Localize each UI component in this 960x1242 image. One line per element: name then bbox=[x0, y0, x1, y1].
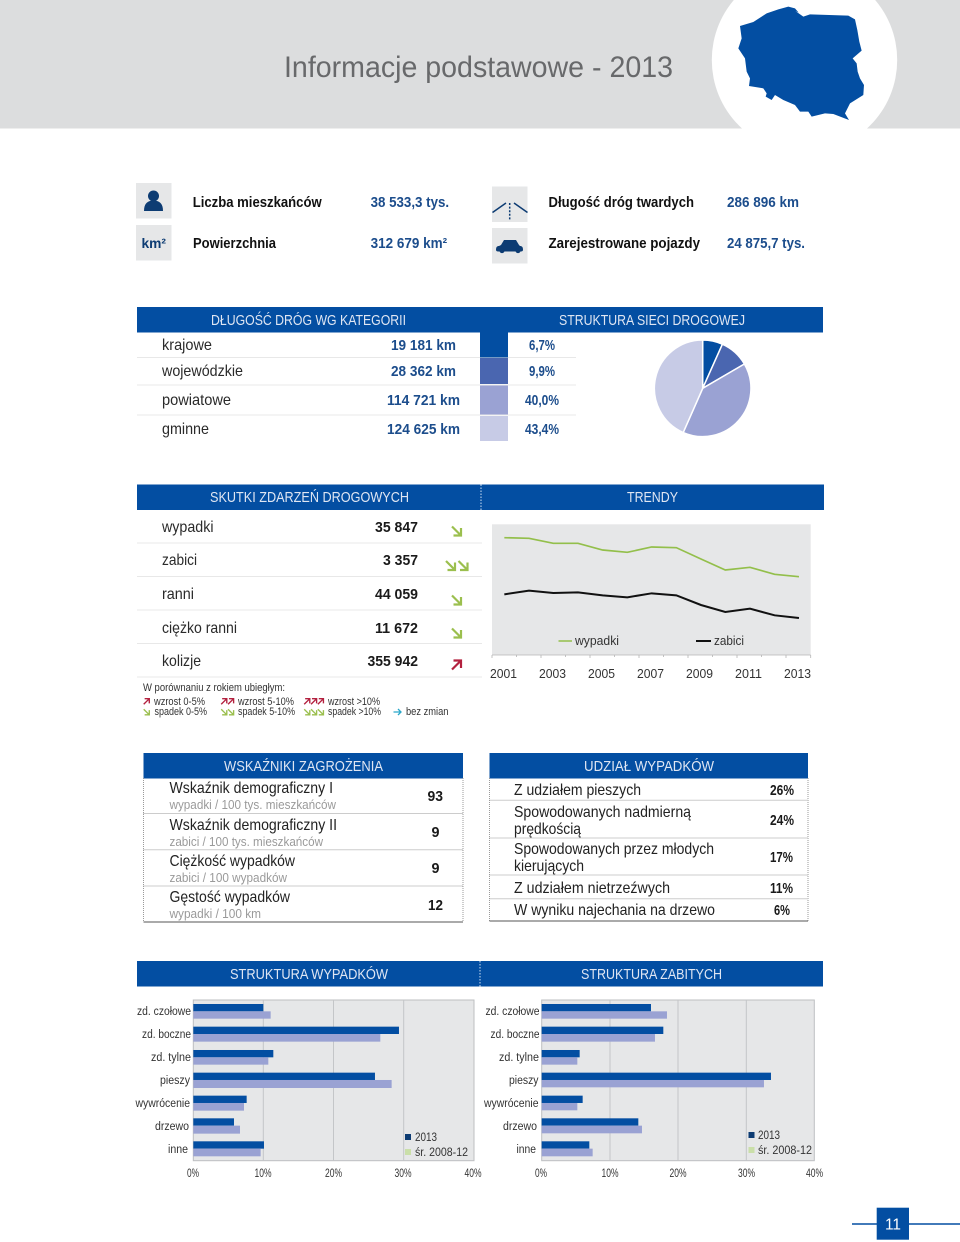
axis labels: 40% bbox=[806, 1168, 823, 1180]
indicator I: 93 bbox=[428, 788, 443, 805]
category labels: wywrócenie bbox=[483, 1098, 538, 1110]
axis labels bbox=[535, 1168, 823, 1180]
category labels: wywrócenie bbox=[135, 1098, 190, 1110]
legend: change compared to previous year: spadek 0-5% bbox=[154, 706, 207, 718]
axis labels: 40% bbox=[464, 1168, 482, 1180]
row: speeding: 24% bbox=[770, 812, 794, 829]
indicator I: wypadki / 100 tys. mieszkańców bbox=[169, 797, 337, 812]
row: powiatowe: powiatowe bbox=[162, 392, 231, 409]
legend: change compared to previous year: W porównaniu z rokiem ubiegłym: bbox=[143, 682, 285, 694]
header band bbox=[0, 0, 960, 128]
year axis: 2009 bbox=[686, 667, 713, 681]
row: ranni bbox=[162, 586, 461, 604]
row: speeding: Spowodowanych nadmierną bbox=[514, 804, 691, 821]
row: pedestrians bbox=[514, 782, 794, 799]
axis labels: 10% bbox=[254, 1168, 272, 1180]
row: ciezko ranni bbox=[162, 620, 461, 638]
row: young drivers: Spowodowanych przez młodych bbox=[514, 841, 714, 858]
row: ciezko ranni: 11 672 bbox=[375, 620, 418, 637]
legend: change compared to previous year: wzrost 5-10% bbox=[237, 696, 294, 708]
pie chart bbox=[654, 340, 751, 437]
row: krajowe: 19 181 km bbox=[391, 338, 456, 354]
row: wypadki bbox=[161, 519, 461, 536]
heading: network structure: STRUKTURA SIECI DROGOWEJ bbox=[559, 312, 745, 329]
axis labels: 20% bbox=[325, 1168, 342, 1180]
legend: change compared to previous year: bez zmian bbox=[406, 706, 448, 718]
indicator II: Wskaźnik demograficzny II bbox=[170, 817, 337, 834]
row: powiatowe: 114 721 km bbox=[387, 393, 460, 409]
row: zabici: zabici bbox=[162, 552, 197, 569]
category labels: zd. czołowe bbox=[137, 1006, 191, 1018]
row: gminne: gminne bbox=[162, 421, 209, 438]
row: ranni: 44 059 bbox=[375, 586, 418, 603]
category labels: drzewo bbox=[155, 1121, 189, 1133]
icon: km2: km² bbox=[142, 236, 167, 251]
row: drunk bbox=[514, 880, 793, 897]
section header: structure bbox=[137, 961, 823, 986]
row: wypadki: 35 847 bbox=[375, 519, 418, 536]
icon: person bbox=[136, 183, 172, 218]
chart legend: wypadki bbox=[574, 634, 619, 648]
heading: road categories: DŁUGOŚĆ DRÓG WG KATEGORII bbox=[211, 311, 406, 329]
title: Informacje podstawowe - 2013 bbox=[284, 51, 673, 84]
category labels: drzewo bbox=[503, 1121, 537, 1133]
row: kolizje bbox=[162, 653, 461, 670]
stats row: road length bbox=[492, 186, 799, 222]
row: zabici: 3 357 bbox=[383, 552, 418, 569]
row: tree: 6% bbox=[774, 902, 790, 919]
category labels: zd. boczne bbox=[142, 1029, 191, 1041]
indicator I bbox=[169, 780, 443, 812]
panel: road network structure pie bbox=[559, 312, 751, 437]
panel: share of accidents bbox=[490, 753, 808, 921]
row: krajowe: 6,7% bbox=[529, 338, 555, 354]
category labels: zd. tylne bbox=[151, 1052, 191, 1064]
row: young drivers: kierujących bbox=[514, 858, 584, 875]
row: ranni: ranni bbox=[162, 586, 194, 603]
chart legend bbox=[405, 1132, 468, 1159]
year axis bbox=[490, 667, 811, 681]
category labels: zd. tylne bbox=[499, 1052, 539, 1064]
panel: risk indicators bbox=[144, 753, 463, 922]
heading: consequences: SKUTKI ZDARZEŃ DROGOWYCH bbox=[210, 489, 409, 506]
heading: risk indicators: WSKAŹNIKI ZAGROŻENIA bbox=[224, 757, 383, 775]
row: young drivers bbox=[514, 841, 793, 875]
axis labels: 20% bbox=[670, 1168, 686, 1180]
indicator II: 9 bbox=[432, 824, 440, 841]
row: pedestrians: 26% bbox=[770, 782, 794, 799]
heading: share of accidents: UDZIAŁ WYPADKÓW bbox=[584, 758, 715, 775]
category labels: pieszy bbox=[509, 1075, 539, 1087]
page number bbox=[852, 1208, 960, 1240]
bar chart: accident structure bbox=[135, 1000, 482, 1180]
row: krajowe: krajowe bbox=[162, 337, 212, 354]
row: speeding: prędkością bbox=[514, 821, 581, 838]
stats row: area bbox=[136, 225, 447, 260]
indicator density: 12 bbox=[428, 897, 443, 914]
row: kolizje: 355 942 bbox=[368, 653, 418, 670]
row: wojewodzkie: 28 362 km bbox=[391, 364, 456, 380]
row: wojewodzkie: wojewódzkie bbox=[161, 363, 243, 380]
category labels bbox=[135, 1006, 191, 1156]
axis labels: 0% bbox=[187, 1168, 199, 1180]
chart legend: śr. 2008-12 bbox=[758, 1145, 812, 1157]
row: gminne: 43,4% bbox=[525, 422, 559, 438]
row: zabici bbox=[162, 552, 468, 570]
legend: change compared to previous year: spadek >10% bbox=[328, 706, 381, 718]
axis labels: 10% bbox=[602, 1168, 618, 1180]
stats row: population: Liczba mieszkańców bbox=[193, 195, 322, 211]
chart legend: 2013 bbox=[415, 1132, 437, 1144]
indicator II bbox=[170, 817, 440, 849]
map of Poland in white circle bbox=[712, 0, 898, 128]
indicator density bbox=[169, 889, 443, 921]
indicator density: Gęstość wypadków bbox=[170, 889, 290, 906]
row: drunk: Z udziałem nietrzeźwych bbox=[514, 880, 670, 897]
chart legend: zabici bbox=[714, 634, 744, 648]
page number: 11 bbox=[885, 1216, 901, 1234]
axis labels: 30% bbox=[394, 1168, 412, 1180]
chart legend bbox=[558, 634, 744, 648]
stats row: road length: 286 896 km bbox=[727, 195, 799, 211]
row: drunk: 11% bbox=[770, 880, 793, 897]
line: wypadki bbox=[504, 538, 799, 577]
legend: change compared to previous year: spadek 5-10% bbox=[238, 706, 295, 718]
indicator severity bbox=[170, 853, 440, 885]
stats row: population bbox=[136, 183, 449, 218]
category labels: inne bbox=[516, 1144, 536, 1156]
row: powiatowe: 40,0% bbox=[525, 393, 559, 409]
chart legend bbox=[748, 1130, 812, 1157]
stats row: vehicles bbox=[492, 228, 805, 264]
axis labels: 30% bbox=[738, 1168, 755, 1180]
heading: fatality structure: STRUKTURA ZABITYCH bbox=[581, 966, 722, 983]
indicator severity: Ciężkość wypadków bbox=[170, 853, 295, 870]
panel: trends line chart bbox=[490, 489, 811, 681]
row: krajowe bbox=[162, 332, 555, 358]
heading: accident structure: STRUKTURA WYPADKÓW bbox=[230, 966, 389, 983]
year axis: 2011 bbox=[735, 667, 762, 681]
stats row: vehicles: Zarejestrowane pojazdy bbox=[548, 236, 700, 252]
row: kolizje: kolizje bbox=[162, 653, 201, 670]
year axis: 2003 bbox=[539, 667, 566, 681]
row: wojewodzkie: 9,9% bbox=[529, 364, 555, 380]
indicator density: wypadki / 100 km bbox=[169, 906, 261, 921]
bar chart: fatality structure bbox=[483, 1000, 823, 1180]
stats row: road length: Długość dróg twardych bbox=[548, 195, 694, 211]
row: wypadki: wypadki bbox=[161, 519, 214, 536]
row: powiatowe bbox=[162, 386, 559, 414]
stats row: area: Powierzchnia bbox=[193, 236, 277, 252]
heading: trends: TRENDY bbox=[627, 489, 678, 506]
category labels bbox=[483, 1006, 540, 1156]
panel: road lengths by category bbox=[137, 307, 823, 441]
category labels: pieszy bbox=[160, 1075, 190, 1087]
legend: change compared to previous year: wzrost >10% bbox=[327, 696, 380, 708]
category labels: inne bbox=[168, 1144, 188, 1156]
indicator severity: zabici / 100 wypadków bbox=[170, 870, 288, 885]
row: young drivers: 17% bbox=[770, 849, 793, 866]
icon: road bbox=[492, 186, 528, 222]
row: wojewodzkie bbox=[161, 358, 555, 384]
legend: change compared to previous year bbox=[143, 682, 448, 718]
year axis: 2013 bbox=[784, 667, 811, 681]
category labels: zd. czołowe bbox=[486, 1006, 540, 1018]
indicator severity: 9 bbox=[432, 860, 440, 877]
year axis: 2005 bbox=[588, 667, 615, 681]
row: ciezko ranni: ciężko ranni bbox=[162, 620, 237, 637]
panel: consequences of road events bbox=[137, 484, 824, 677]
indicator I: Wskaźnik demograficzny I bbox=[170, 780, 333, 797]
axis labels bbox=[187, 1168, 482, 1180]
icon: km2 bbox=[136, 225, 172, 260]
stats row: population: 38 533,3 tys. bbox=[371, 195, 449, 211]
row: tree: W wyniku najechania na drzewo bbox=[514, 902, 715, 919]
row: gminne bbox=[162, 416, 559, 441]
row: gminne: 124 625 km bbox=[387, 422, 460, 438]
category labels: zd. boczne bbox=[490, 1029, 540, 1041]
year axis: 2001 bbox=[490, 667, 517, 681]
axis labels: 0% bbox=[535, 1168, 547, 1180]
row: speeding bbox=[514, 804, 794, 838]
indicator II: zabici / 100 tys. mieszkańców bbox=[170, 834, 324, 849]
icon: car bbox=[492, 228, 528, 264]
stats row: area: 312 679 km² bbox=[371, 236, 447, 252]
stats row: vehicles: 24 875,7 tys. bbox=[727, 236, 805, 252]
legend: change compared to previous year: wzrost 0-5% bbox=[153, 696, 205, 708]
year axis: 2007 bbox=[637, 667, 664, 681]
chart legend: śr. 2008-12 bbox=[415, 1147, 468, 1159]
row: pedestrians: Z udziałem pieszych bbox=[514, 782, 641, 799]
line: zabici bbox=[504, 591, 799, 618]
chart legend: 2013 bbox=[758, 1130, 780, 1142]
